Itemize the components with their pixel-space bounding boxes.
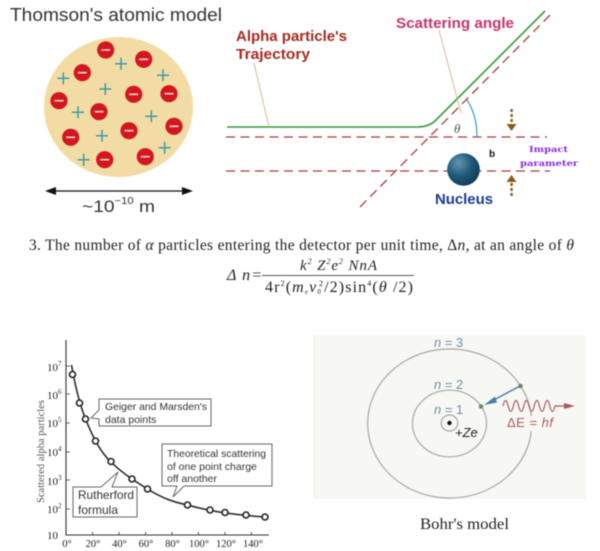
y axis labels: 5	[58, 416, 62, 424]
y axis labels: 7	[58, 360, 62, 368]
label: +Ze: +Ze	[455, 425, 478, 440]
electrons on orbits	[479, 384, 523, 409]
y axis labels: 10	[47, 390, 58, 402]
nucleus dot	[447, 421, 452, 425]
label: theta: θ	[454, 121, 461, 136]
panel: scattering diagram	[226, 11, 579, 208]
x axis labels	[62, 539, 263, 550]
formula: m	[292, 279, 304, 296]
formula: 0	[317, 288, 321, 296]
y axis labels: 10	[47, 530, 58, 542]
label: Impact parameter: Impact	[529, 145, 568, 155]
y axis labels: 3	[58, 474, 62, 482]
callout: Geiger and Marsden's data points: data points	[105, 414, 156, 426]
y axis labels: 10	[47, 476, 58, 488]
panel: Thomson's atomic model	[10, 5, 222, 216]
x axis labels: 0°	[62, 539, 72, 550]
formula: NnA	[344, 258, 378, 274]
nucleus	[447, 153, 480, 186]
callout: Theoretical scattering: of one point charge	[167, 461, 257, 473]
label: Alpha particle's Trajectory: Trajectory	[236, 46, 311, 63]
x axis labels: 80°	[165, 539, 180, 550]
callout: Geiger and Marsden's data points: Geiger and Marsden's	[105, 401, 207, 413]
x axis labels: 40°	[112, 539, 127, 550]
data points	[70, 372, 268, 520]
formula: 4	[367, 279, 371, 288]
axes	[66, 340, 269, 535]
callout: Rutherford formula: formula	[78, 503, 118, 517]
formula: 2	[308, 257, 312, 266]
y axis labels: 2	[58, 502, 62, 510]
label: Impact parameter: parameter	[520, 159, 579, 169]
formula: (	[286, 279, 291, 296]
formula: 2	[281, 279, 285, 288]
electron minus signs	[54, 50, 178, 160]
text block: statement 3: 3. The number of α particles entering the detector per unit time, Δn, at an angle of θ	[29, 237, 574, 254]
formula: e	[331, 258, 338, 274]
y axis labels: 4	[58, 445, 62, 453]
leader lines	[254, 30, 461, 127]
formula: (	[372, 279, 378, 296]
heading: Thomson's atomic model: Thomson's atomic model	[10, 5, 222, 25]
y axis labels: 6	[58, 388, 62, 396]
angle arc	[467, 100, 477, 137]
x axis labels: 100°	[189, 539, 209, 550]
callout: Rutherford formula: Rutherford	[78, 488, 134, 502]
orbit labels: n = 3	[434, 335, 463, 350]
label: energy equation: ΔE = hf	[507, 415, 554, 430]
formula: θ /2)	[379, 279, 413, 296]
label: b: b	[489, 149, 495, 160]
formula: Δ n=	[226, 267, 262, 284]
orbit n=2	[412, 390, 486, 457]
x axis labels: 140°	[243, 539, 263, 550]
label: Nucleus: Nucleus	[435, 191, 493, 208]
Rutherford curve	[72, 365, 264, 517]
label: Alpha particle's Trajectory	[236, 28, 347, 63]
formula: e	[305, 288, 308, 296]
formula: 2	[319, 279, 323, 288]
label: Impact parameter	[520, 145, 579, 169]
dashed guide lines	[226, 12, 553, 207]
photon wave	[503, 400, 575, 412]
callout: Theoretical scattering	[162, 444, 272, 497]
x axis labels: 20°	[86, 539, 100, 550]
size label: −10	[115, 196, 134, 207]
formula: v	[309, 279, 317, 296]
electrons	[50, 41, 183, 168]
callout: Geiger and Marsden's data points	[91, 399, 211, 426]
callout: Theoretical scattering: off another	[167, 473, 218, 485]
formula	[226, 257, 414, 296]
formula: 2	[339, 257, 343, 266]
formula: /2)sin	[324, 279, 366, 296]
formula: 2	[326, 257, 330, 266]
callout: Theoretical scattering: Theoretical scattering	[167, 448, 266, 460]
impact parameter arrows	[506, 109, 516, 196]
atom sphere	[44, 37, 193, 177]
panel: scattering chart	[36, 340, 272, 550]
background panel	[313, 335, 586, 499]
label: Alpha particle's Trajectory: Alpha particle's	[236, 28, 347, 45]
formula: Z	[312, 258, 326, 274]
panel: Bohr model	[313, 335, 586, 533]
y axis labels: 10	[47, 447, 58, 459]
positive charges	[57, 58, 171, 166]
orbit n=3	[368, 349, 531, 498]
caption: Bohr's model: Bohr's model	[420, 516, 510, 533]
transition arrow	[484, 386, 520, 405]
orbit n=1	[441, 415, 458, 431]
orbit labels	[434, 335, 463, 417]
x axis labels: 120°	[216, 539, 236, 550]
y axis title: Scattered alpha particles	[36, 400, 47, 503]
callout: Rutherford formula	[73, 472, 137, 517]
y axis labels: 10	[47, 362, 58, 374]
orbit labels: n = 1	[434, 402, 463, 417]
alpha particle trajectory	[227, 11, 545, 127]
y axis labels: 10	[47, 504, 58, 516]
size arrow	[45, 187, 193, 195]
formula: 4r	[265, 279, 279, 296]
axis ticks	[66, 366, 252, 535]
orbit labels: n = 2	[434, 377, 463, 392]
size label: ~10	[82, 197, 111, 216]
y axis labels	[47, 360, 62, 542]
label: Scattering angle: Scattering angle	[396, 15, 514, 32]
formula: k	[300, 258, 307, 274]
size label: m	[134, 197, 155, 216]
x axis labels: 60°	[139, 539, 153, 550]
y axis labels: 10	[47, 418, 58, 430]
